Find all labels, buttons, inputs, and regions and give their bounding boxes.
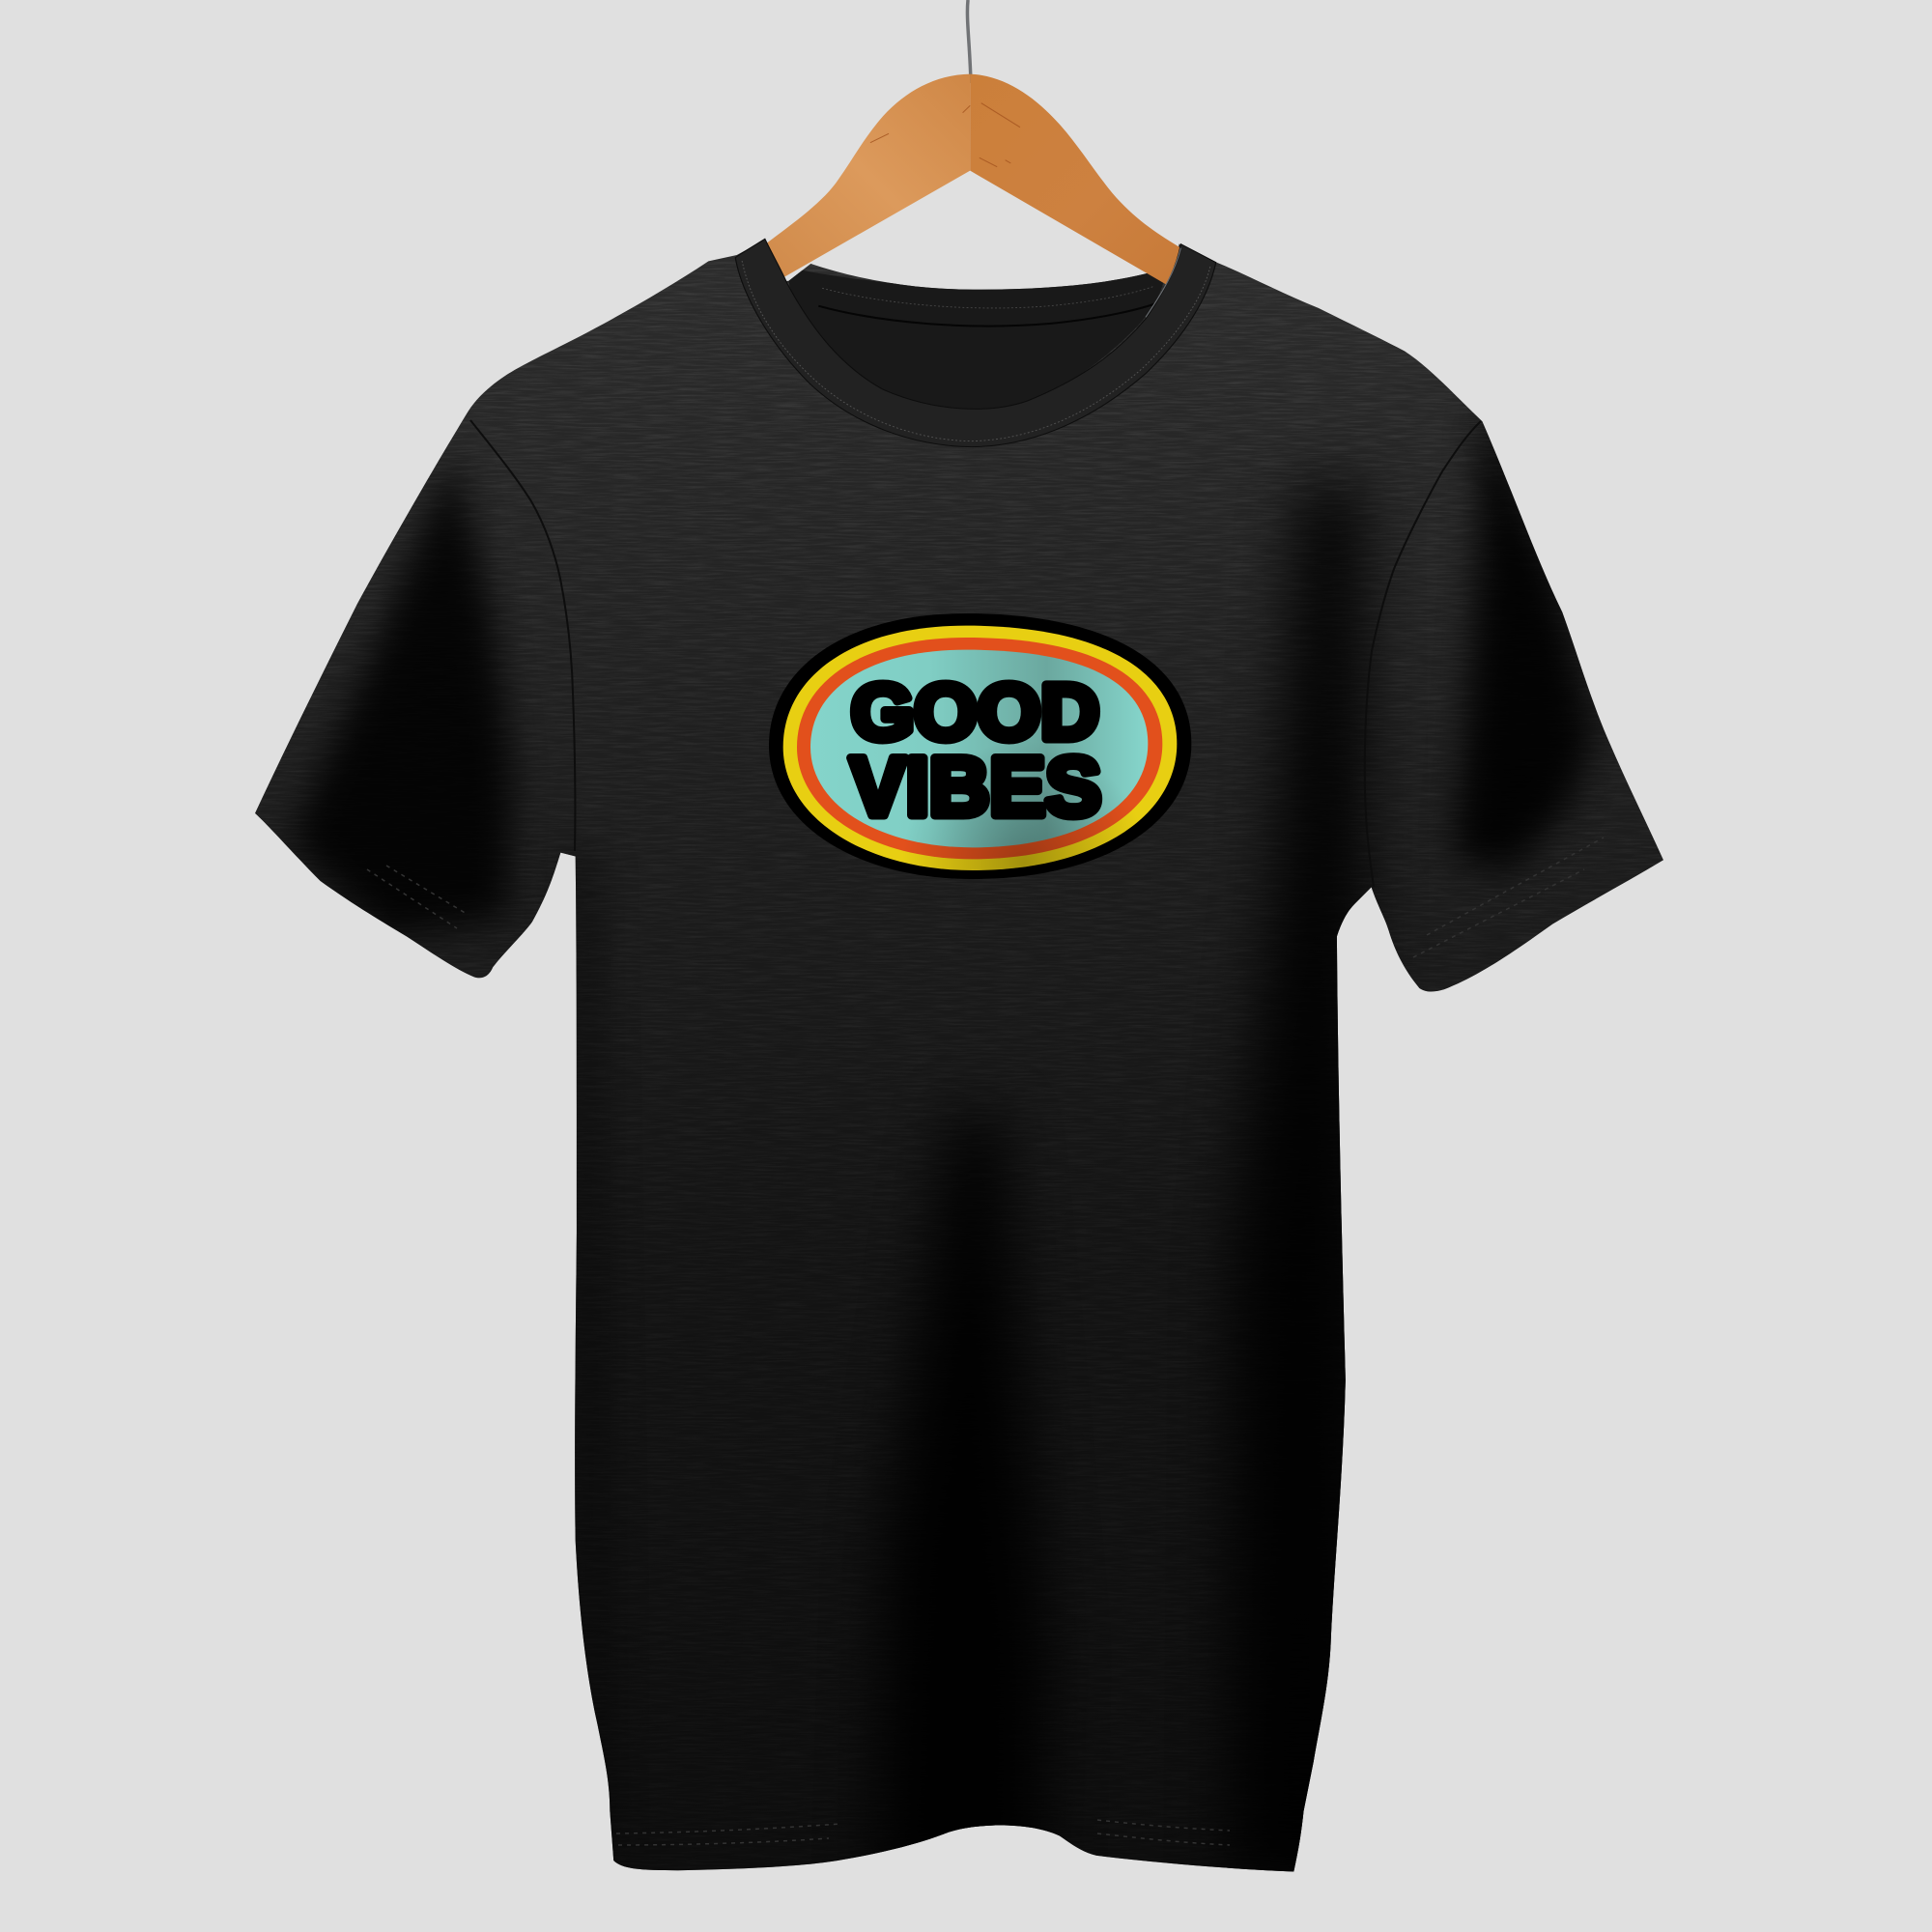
- sleeve seams: [470, 420, 1481, 887]
- badge orange ring: [797, 638, 1162, 859]
- badge lower shading: [783, 626, 1177, 870]
- badge headline: [850, 668, 1101, 834]
- sleeve and hem stitching: [367, 838, 1604, 1845]
- back collar stitching: [818, 287, 1162, 327]
- hanger wire hook: [967, 0, 971, 83]
- badge headline: GOOD: [851, 668, 1099, 756]
- wood grain marks: [870, 103, 1020, 167]
- front collar band: [735, 239, 1216, 447]
- fold shadows: [290, 386, 1594, 1893]
- wooden hanger: [767, 74, 1180, 287]
- badge teal centre: [810, 650, 1148, 847]
- hanger right arm: [970, 74, 1180, 287]
- badge black outer ring: [769, 613, 1191, 879]
- good vibes badge: [769, 613, 1191, 879]
- hanger left arm: [767, 74, 970, 278]
- t-shirt on hanger product illustration: [255, 0, 1663, 1872]
- t-shirt body: [255, 243, 1663, 1872]
- badge headline: VIBES: [850, 741, 1101, 834]
- back neck inside: [787, 268, 1165, 418]
- badge yellow ring: [783, 626, 1177, 870]
